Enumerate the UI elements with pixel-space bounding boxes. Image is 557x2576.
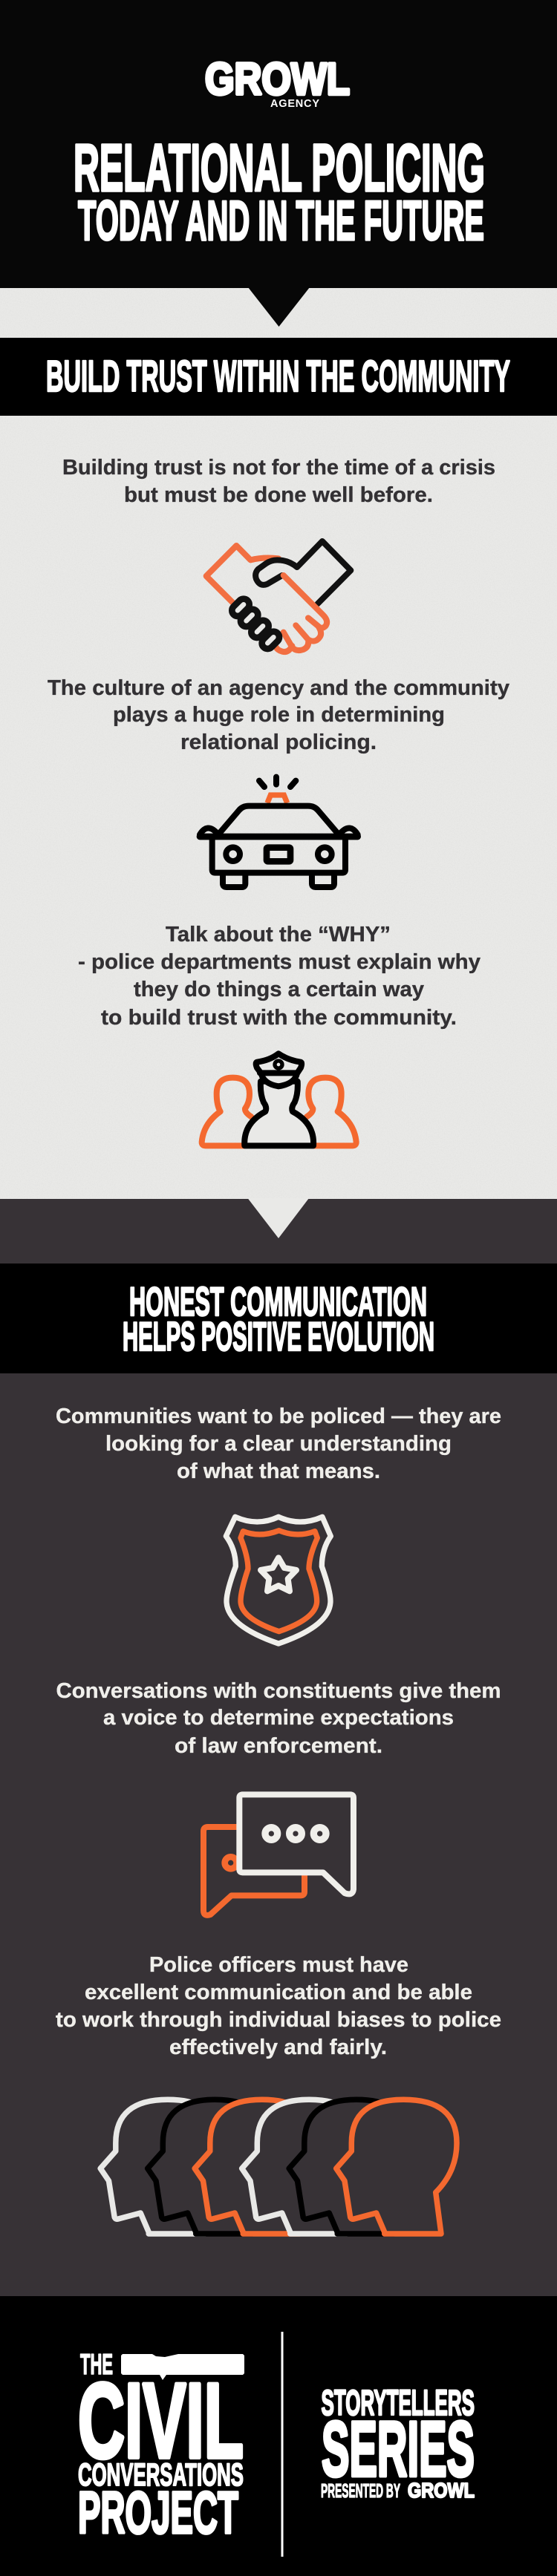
text: culture of an agency xyxy=(48,676,509,754)
text: talk about the why: to build trust with the community. xyxy=(101,1006,457,1030)
arrow: section pointer xyxy=(248,1198,309,1238)
text: conversations with constituents: Conversations with constituents give them xyxy=(56,1679,501,1703)
text: talk about the why: they do things a certain way xyxy=(134,978,424,1001)
text: talk about the why: - police departments must explain why xyxy=(78,950,481,974)
logo: storytellers series xyxy=(321,2384,475,2502)
text: culture of an agency: The culture of an agency and the community xyxy=(48,676,509,700)
logo: growl agency: GROWL xyxy=(205,54,350,104)
icon: speech bubbles xyxy=(203,1794,354,1915)
panel: header xyxy=(0,0,557,327)
divider xyxy=(281,2332,284,2557)
icon: officer with community xyxy=(202,1053,356,1145)
text: communities want to be policed: Communities want to be policed — they are xyxy=(56,1405,501,1428)
icon: police badge xyxy=(226,1517,330,1644)
icon: handshake xyxy=(206,541,351,652)
text: talk about the why: Talk about the “WHY” xyxy=(166,923,391,947)
logo: storytellers series: GROWL xyxy=(408,2479,475,2502)
text: police officers must have: Police officers must have xyxy=(149,1953,408,1977)
panel: footer xyxy=(0,2296,557,2576)
text: communities want to be policed xyxy=(56,1405,501,1483)
logo: the civil conversations project: THE xyxy=(80,2349,113,2381)
logo: storytellers series: PRESENTED BY xyxy=(321,2479,400,2502)
text: police officers must have: effectively and fairly. xyxy=(169,2036,387,2059)
text: conversations with constituents xyxy=(56,1679,501,1758)
title xyxy=(74,131,485,252)
section heading band: build trust xyxy=(0,338,557,416)
text: building trust: but must be done well before. xyxy=(124,483,433,507)
logo: the civil conversations project xyxy=(78,2349,244,2546)
text: communities want to be policed: of what that means. xyxy=(177,1459,380,1483)
text: police officers must have: to work through individual biases to police xyxy=(56,2008,501,2032)
icon: police car xyxy=(200,777,358,887)
text: culture of an agency: plays a huge role in determining xyxy=(113,703,445,727)
logo: the civil conversations project: PROJECT xyxy=(78,2479,238,2546)
text: culture of an agency: relational policing. xyxy=(180,730,377,754)
text: building trust xyxy=(62,456,495,507)
text: conversations with constituents: a voice to determine expectations xyxy=(103,1706,454,1730)
logo: the civil conversations project: CONVERSATIONS xyxy=(78,2457,244,2493)
panel: honest communication xyxy=(0,1198,557,2296)
text: conversations with constituents: of law enforcement. xyxy=(175,1734,382,1758)
text: police officers must have: excellent communication and be able xyxy=(85,1981,472,2004)
icon: row of heads xyxy=(100,2099,457,2234)
arrow: header pointer xyxy=(248,287,310,327)
section heading band: honest communication xyxy=(0,1264,557,1373)
text: talk about the why xyxy=(78,923,481,1030)
text: communities want to be policed: looking for a clear understanding xyxy=(105,1432,452,1456)
logo: the civil conversations project: CIVIL xyxy=(78,2362,244,2480)
text: building trust: Building trust is not for the time of a crisis xyxy=(62,456,495,480)
text: police officers must have xyxy=(56,1953,501,2059)
panel: build trust within the community xyxy=(0,288,557,1199)
logo: growl agency: AGENCY xyxy=(270,98,319,110)
